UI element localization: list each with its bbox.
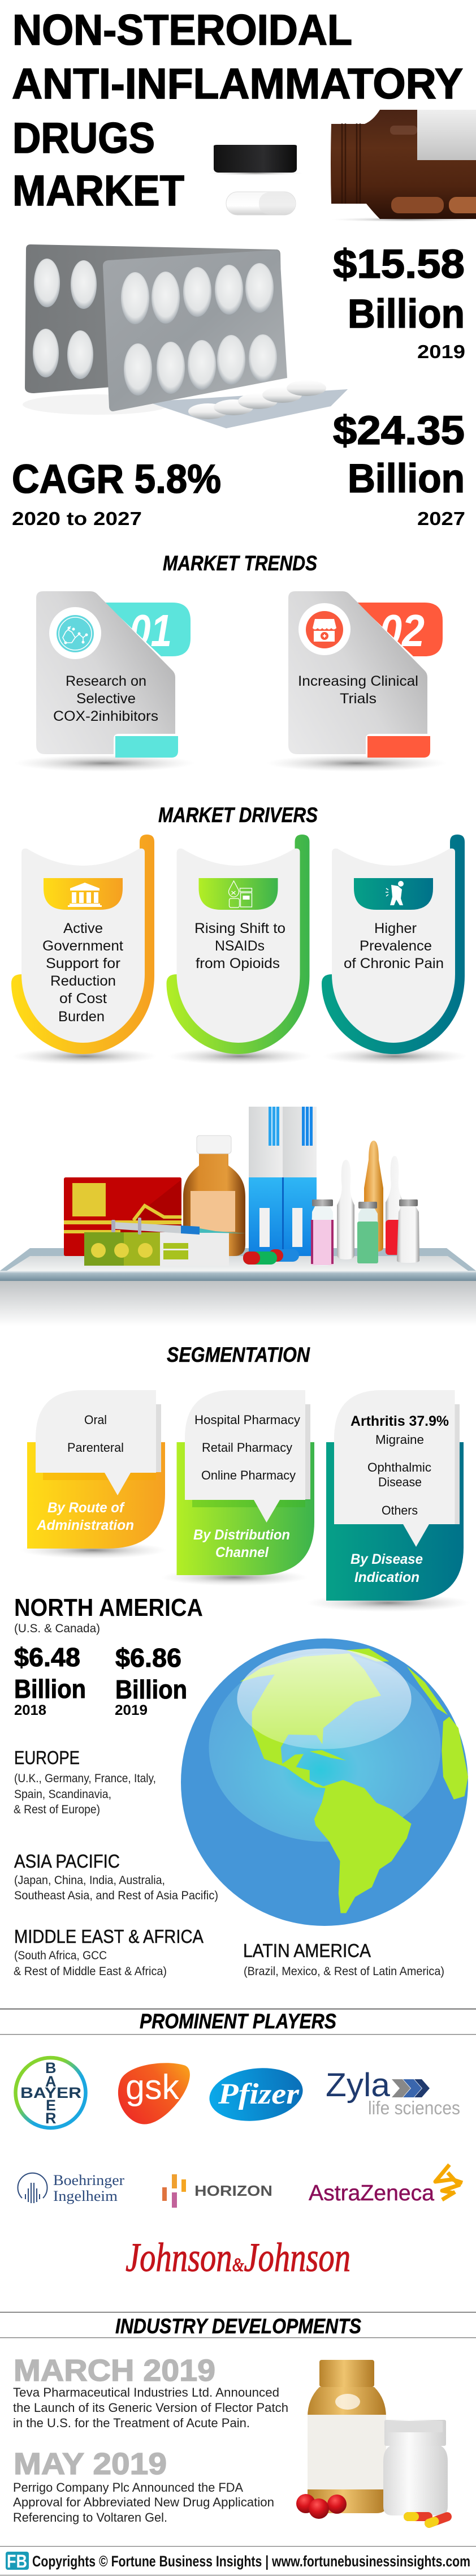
heading: industry developments: INDUSTRY DEVELOPMENTS: [115, 2315, 361, 2338]
text: driver 3: Prevalence: [360, 938, 432, 954]
text: route list: Parenteral: [67, 1440, 124, 1455]
text block: may 2019: Approval for Abbreviated New Drug Application: [13, 2495, 274, 2509]
label: channel: By Distribution: [193, 1527, 290, 1543]
panel: trend 01: [14, 591, 195, 772]
text: channel list: Hospital Pharmacy: [194, 1413, 300, 1427]
title: DRUGS: [12, 114, 155, 162]
heading: segmentation: SEGMENTATION: [167, 1343, 310, 1366]
region: middle east and africa: [14, 1926, 204, 1978]
region: latin america: (Brazil, Mexico, & Rest of Latin America): [244, 1965, 444, 1978]
stat: 2019: Billion: [115, 1675, 187, 1704]
stat: 2019: [115, 1643, 187, 1718]
icon: person with back pain: [354, 878, 433, 910]
logo: johnson and johnson: Johnson&Johnson: [126, 2235, 350, 2280]
region: latin america: LATIN AMERICA: [243, 1940, 371, 1961]
region: asia pacific: (Japan, China, India, Australia,: [14, 1874, 165, 1887]
text: driver 1: [42, 921, 123, 1025]
region: middle east and africa: & Rest of Middle East & Africa): [14, 1965, 167, 1978]
blue boxes: [249, 1107, 317, 1256]
text: driver 1: Reduction: [50, 973, 116, 989]
image: pharmacy shelf: [0, 1107, 476, 1326]
logo: bayer: B: [45, 2059, 57, 2076]
amber bottle: [183, 1136, 245, 1256]
region: north america: NORTH AMERICA: [14, 1594, 203, 1622]
region: middle east and africa: (South Africa, GCC: [14, 1949, 107, 1962]
logo: horizon: [162, 2174, 272, 2208]
label: channel: [193, 1527, 290, 1560]
stat: 2027 market value: [333, 408, 465, 529]
stat: 2027 market value: 2027: [417, 508, 465, 529]
text block: may 2019: MAY 2019: [14, 2447, 167, 2481]
text: driver 3: [344, 921, 444, 971]
panel: by disease indication: [306, 1390, 470, 1612]
panel: driver 3: [322, 835, 468, 1065]
logo: pfizer: Pfizer: [218, 2078, 300, 2110]
region: europe: Spain, Scandinavia,: [14, 1788, 111, 1801]
region: europe: & Rest of Europe): [14, 1803, 100, 1816]
icon: brown medicine bottle: [331, 110, 476, 222]
text: driver 1: Support for: [46, 956, 120, 971]
text: route list: Oral: [84, 1413, 107, 1427]
label: disease: By Disease: [350, 1551, 423, 1567]
text block: march 2019: in the U.S. for the Treatment of Acute Pain.: [13, 2416, 250, 2430]
text block: march 2019: the Launch of its Generic Version of Flector Patch: [13, 2401, 288, 2415]
label: route: By Route of: [47, 1500, 126, 1516]
logo: boehringer ingelheim: Ingelheim: [53, 2188, 118, 2204]
text: trend 01: [53, 673, 158, 724]
logo: gsk: gsk: [126, 2068, 180, 2107]
logo: gsk: [118, 2063, 190, 2125]
capsules: [243, 1249, 299, 1265]
title: [12, 6, 463, 215]
text: trend 01: Selective: [76, 691, 136, 707]
syringe: [111, 1218, 246, 1235]
region: europe: [14, 1747, 156, 1816]
text: trend 02: Trials: [340, 691, 377, 707]
panel: by distribution channel: [161, 1390, 314, 1586]
stat: 2018: $6.48: [14, 1642, 80, 1672]
logo: astrazeneca: [309, 2165, 462, 2205]
text block: may 2019: Referencing to Voltaren Gel.: [13, 2510, 167, 2525]
label: route: Administration: [36, 1517, 134, 1533]
logo: boehringer ingelheim: Boehringer: [53, 2172, 124, 2188]
image: gold and white bottles: [296, 2360, 453, 2529]
icon: government building: [44, 878, 123, 910]
text: channel list: Online Pharmacy: [201, 1468, 296, 1482]
icon: bottle cap: [207, 145, 304, 175]
vials and ampoules: [311, 1141, 419, 1266]
text: trend 01: Research on: [66, 673, 146, 689]
text: driver 3: Higher: [374, 921, 417, 936]
text: driver 1: Government: [42, 938, 123, 954]
stat: 2019 market value: 2019: [417, 341, 465, 362]
stat: CAGR: CAGR 5.8%: [12, 457, 221, 502]
stat: 2018: Billion: [14, 1674, 86, 1704]
icon: pharmacy store: [298, 603, 350, 655]
text: driver 3: of Chronic Pain: [344, 956, 444, 971]
text: driver 2: from Opioids: [196, 956, 280, 971]
stat: CAGR: 2020 to 2027: [12, 508, 142, 529]
text: disease list: [350, 1413, 449, 1517]
logo: bayer: E: [46, 2097, 56, 2114]
text: disease list: Disease: [378, 1475, 422, 1489]
title: MARKET: [12, 167, 184, 215]
logo: horizon: HORIZON: [194, 2182, 272, 2199]
logo: bayer: A: [45, 2073, 57, 2090]
panel: trend 01: 01: [129, 605, 172, 656]
text block: march 2019: MARCH 2019: [14, 2354, 215, 2388]
panel: trend 02: 02: [379, 605, 425, 656]
label: channel: Channel: [215, 1545, 269, 1560]
text: driver 2: NSAIDs: [215, 938, 265, 954]
logo: bayer: [16, 2058, 86, 2128]
text block: march 2019: Teva Pharmaceutical Industries Ltd. Announced: [13, 2385, 279, 2399]
panel: driver 2: [166, 835, 312, 1065]
stat: 2018: [14, 1642, 86, 1718]
stat: 2027 market value: Billion: [348, 457, 465, 501]
text: driver 1: Burden: [58, 1009, 105, 1025]
text: driver 2: Rising Shift to: [194, 921, 285, 936]
text: driver 1: of Cost: [59, 991, 107, 1007]
text: driver 1: Active: [63, 921, 103, 936]
stat: 2019 market value: [333, 242, 465, 362]
stat: 2019 market value: Billion: [348, 292, 465, 337]
region: asia pacific: Southeast Asia, and Rest of Asia Pacific): [14, 1889, 218, 1902]
icon: fortune business insights logo: FB: [7, 2551, 27, 2571]
region: north america: (U.S. & Canada): [14, 1622, 100, 1635]
icon: molecule: [49, 607, 101, 659]
label: route: [36, 1500, 134, 1533]
logo: bayer: BAYER: [20, 2084, 81, 2101]
stat: 2019: $6.86: [115, 1643, 181, 1672]
region: latin america: [243, 1940, 444, 1978]
logo: zyla life sciences: Zyla: [326, 2067, 391, 2104]
label: disease: [350, 1551, 423, 1585]
logo: boehringer ingelheim: [18, 2172, 124, 2204]
text: disease list: Ophthalmic: [367, 1460, 431, 1474]
logo: bayer: R: [45, 2110, 57, 2127]
region: europe: EUROPE: [14, 1747, 80, 1768]
text: channel list: [194, 1413, 300, 1482]
text block: may 2019: Perrigo Company Plc Announced the FDA: [13, 2480, 243, 2495]
logo: astrazeneca: AstraZeneca: [309, 2181, 434, 2205]
stat: 2019: 2019: [115, 1702, 148, 1718]
text block: march 2019: [13, 2354, 288, 2430]
label: disease: Indication: [354, 1569, 419, 1585]
text: trend 01: COX-2inhibitors: [53, 708, 158, 724]
region: asia pacific: ASIA PACIFIC: [14, 1851, 120, 1872]
text: trend 02: [298, 673, 418, 707]
title: NON-STEROIDAL: [12, 6, 352, 54]
heading: market trends: MARKET TRENDS: [163, 552, 317, 575]
icon: white capsule: [226, 192, 296, 215]
stat: 2019 market value: $15.58: [333, 242, 465, 287]
text: disease list: Others: [382, 1503, 418, 1517]
region: middle east and africa: MIDDLE EAST & AFRICA: [14, 1926, 204, 1947]
image: blister packs: [23, 244, 348, 428]
logo: pfizer: [206, 2063, 306, 2126]
panel: driver 1: [11, 835, 157, 1065]
text: disease list: Migraine: [375, 1433, 424, 1447]
green box: [84, 1232, 229, 1266]
title: ANTI-INFLAMMATORY: [12, 60, 463, 108]
chart: globe: [181, 1639, 468, 1926]
heading: market drivers: MARKET DRIVERS: [158, 803, 318, 827]
region: north america: [14, 1594, 203, 1718]
panel: by route of administration: [20, 1390, 167, 1559]
region: asia pacific: [14, 1851, 218, 1902]
panel: trend 02: [266, 591, 447, 772]
region: europe: (U.K., Germany, France, Italy,: [14, 1772, 156, 1785]
text block: may 2019: [13, 2447, 274, 2525]
stat: 2018: 2018: [14, 1702, 46, 1718]
stat: 2027 market value: $24.35: [333, 408, 465, 453]
text: trend 02: Increasing Clinical: [298, 673, 418, 689]
text: driver 2: [194, 921, 285, 971]
text: disease list: Arthritis 37.9%: [350, 1413, 449, 1429]
icon: drugs and opioids: [199, 878, 278, 910]
red box: [64, 1177, 181, 1256]
logo: zyla life sciences: life sciences: [368, 2097, 460, 2118]
logo: zyla life sciences: [326, 2067, 460, 2118]
text: route list: [67, 1413, 124, 1455]
stat: CAGR: [12, 457, 221, 529]
heading: prominent players: PROMINENT PLAYERS: [140, 2010, 336, 2033]
text: channel list: Retail Pharmacy: [202, 1440, 292, 1455]
